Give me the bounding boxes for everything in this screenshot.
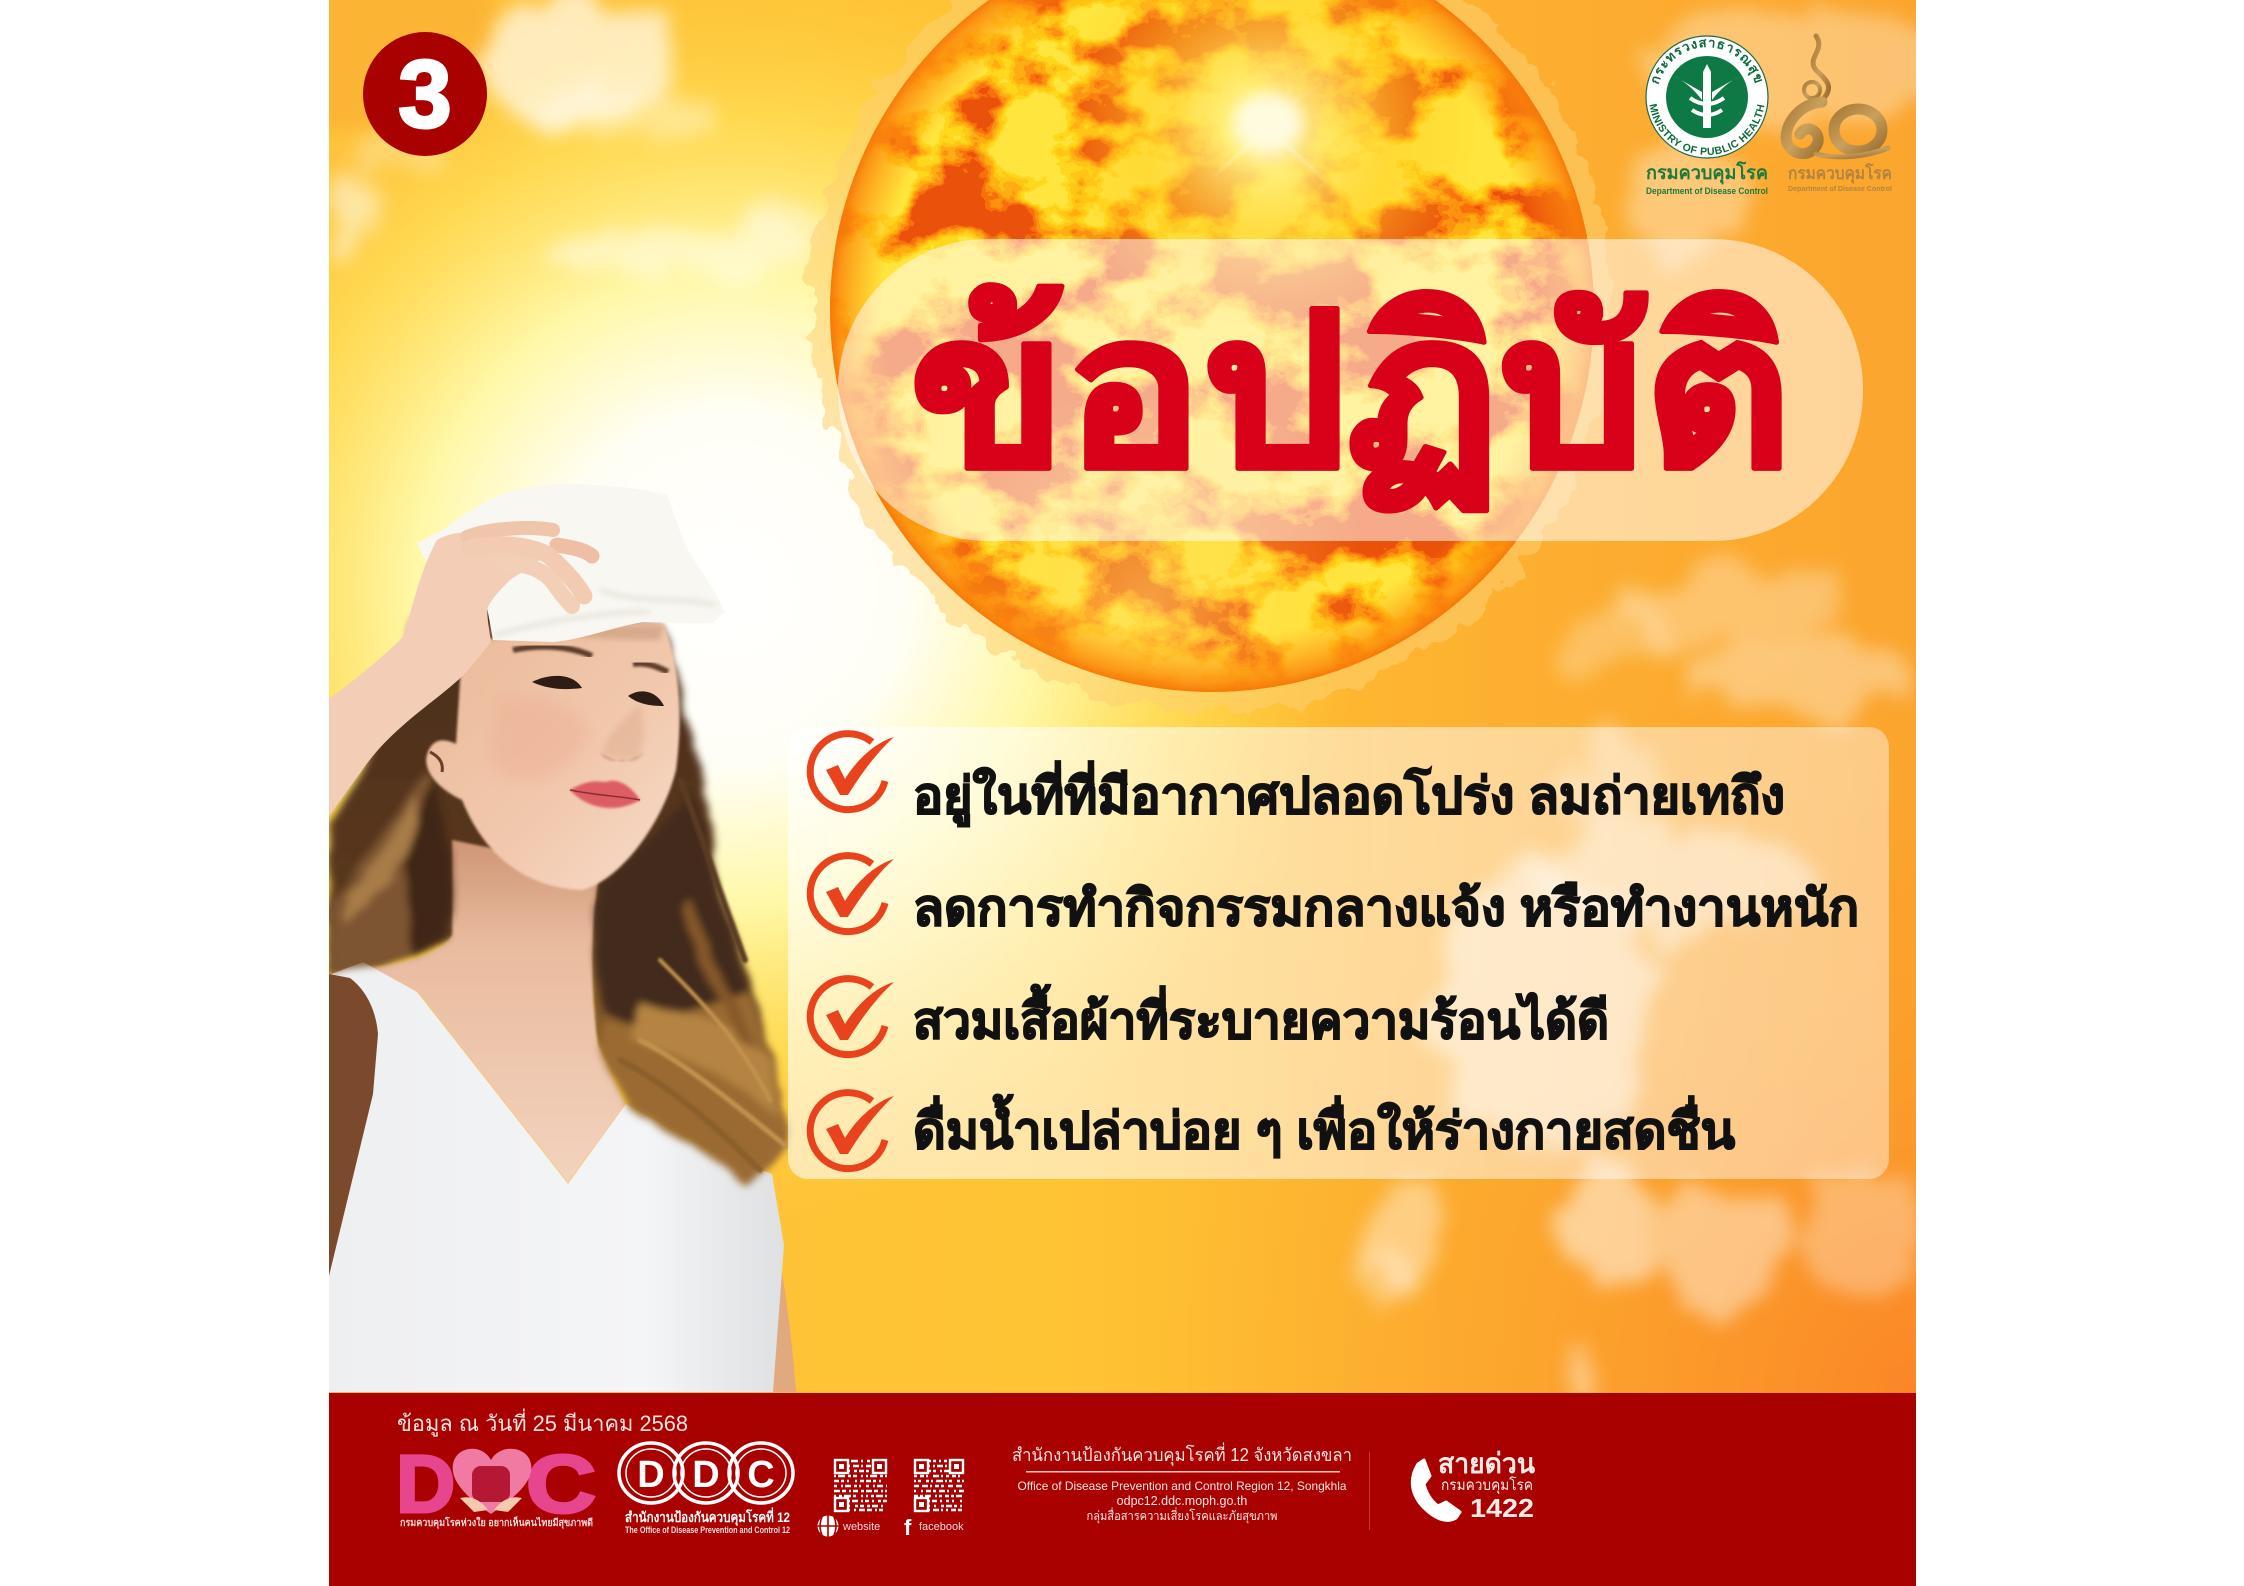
tip 3: สวมเสื้อผ้าที่ระบายความร้อนได้ดี	[913, 984, 1609, 1049]
tip 2	[810, 856, 1859, 936]
step number badge: 3	[398, 41, 452, 148]
infographic canvas	[329, 0, 1916, 1586]
face shading	[430, 625, 668, 808]
icon and label: website: website	[842, 1521, 880, 1533]
office address: Office of Disease Prevention and Control Region 12, Songkhla	[1018, 1479, 1347, 1493]
strap	[329, 974, 378, 1276]
office address: สำนักงานป้องกันควบคุมโรคที่ 12 จังหวัดสงขลา	[1012, 1442, 1352, 1466]
background sky	[195, 0, 1916, 1393]
tip 3	[810, 979, 1609, 1055]
logo: white DDC office 12: C	[747, 1454, 775, 1496]
QR code: website	[834, 1459, 887, 1512]
icon and label: facebook	[904, 1515, 964, 1540]
title pill	[838, 239, 1863, 541]
tip 4	[810, 1093, 1735, 1169]
sun sparkle	[1214, 84, 1326, 182]
tip 1: อยู่ในที่ที่มีอากาศปลอดโปร่ง ลมถ่ายเทถึง	[913, 761, 1785, 827]
sun	[810, 0, 1614, 712]
face	[426, 623, 680, 890]
neck and chest	[363, 840, 626, 1184]
office address: odpc12.ddc.moph.go.th	[1117, 1494, 1247, 1508]
office address: กลุ่มสื่อสารความเสี่ยงโรคและภัยสุขภาพ	[1086, 1507, 1278, 1524]
hotline: สายด่วน	[1438, 1448, 1535, 1479]
towel folds	[495, 590, 715, 635]
footer band	[329, 1393, 1916, 1586]
arm and hand	[329, 528, 592, 816]
tip 2: ลดการทำกิจกรรมกลางแจ้ง หรือทำงานหนัก	[913, 880, 1859, 936]
hotline: กรมควบคุมโรค	[1441, 1476, 1533, 1495]
fine hair strokes right	[620, 780, 786, 1170]
logo: white DDC office 12	[619, 1443, 793, 1535]
logo: pink DDC	[396, 1439, 596, 1530]
clouds	[318, 0, 1940, 1398]
hotline: 1422	[1470, 1493, 1534, 1523]
logo: ministry of public health: กระทรวงสาธารณสุข	[1652, 39, 1762, 84]
check icon 2	[810, 856, 894, 932]
logo: 60th anniversary: Department of Disease Control	[1788, 184, 1892, 193]
logo: pink DDC: D	[396, 1439, 455, 1530]
logo: white DDC office 12: สำนักงานป้องกันควบคุมโรคที่ 12	[625, 1507, 790, 1526]
check icon 4	[810, 1093, 894, 1169]
hair strands left	[330, 770, 452, 972]
tips panel	[788, 727, 1889, 1179]
towel	[417, 484, 725, 642]
logo: pink DDC: C	[526, 1439, 596, 1530]
icon and label: website	[817, 1515, 880, 1537]
QR code: facebook	[914, 1459, 964, 1512]
icon and label: facebook: facebook	[919, 1521, 964, 1533]
hair back	[329, 610, 788, 1186]
hotline	[1412, 1448, 1535, 1523]
logo: ministry of public health: Department of Disease Control	[1646, 186, 1768, 197]
office address	[1012, 1442, 1352, 1524]
logo: white DDC office 12: D	[692, 1454, 720, 1496]
icon: phone	[1412, 1460, 1460, 1520]
tip 1	[810, 734, 1785, 827]
shirt	[329, 962, 784, 1392]
icon and label: facebook: f	[904, 1515, 912, 1540]
logo: white DDC office 12: The Office of Disease Prevention and Control 12	[625, 1525, 790, 1535]
logo: 60th anniversary: กรมควบคุมโรค	[1788, 163, 1892, 184]
person	[329, 484, 796, 1392]
step number badge	[363, 32, 487, 156]
logo: white DDC office 12: D	[637, 1454, 665, 1496]
logo: ministry of public health	[1645, 35, 1769, 197]
title: ข้อปฏิบัติ	[910, 273, 1792, 512]
check icon 1	[810, 734, 894, 810]
check icon 3	[810, 979, 894, 1055]
sun flare halo	[810, 0, 1614, 712]
hair strands right	[596, 790, 788, 1186]
logo: 60th anniversary	[1786, 36, 1892, 193]
data date: ข้อมูล ณ วันที่ 25 มีนาคม 2568	[397, 1408, 688, 1437]
right arm sliver	[773, 1272, 796, 1392]
tip 4: ดื่มน้ำเปล่าบ่อย ๆ เพื่อให้ร่างกายสดชื่น	[913, 1094, 1735, 1159]
logo: ministry of public health: กรมควบคุมโรค	[1646, 161, 1768, 185]
sun disc	[828, 0, 1598, 700]
logo: pink DDC: กรมควบคุมโรคห่วงใย อยากเห็นคนไทยมีสุขภาพดี	[400, 1515, 593, 1529]
logo: ministry of public health: MINISTRY OF PUBLIC HEALTH	[1650, 104, 1764, 155]
